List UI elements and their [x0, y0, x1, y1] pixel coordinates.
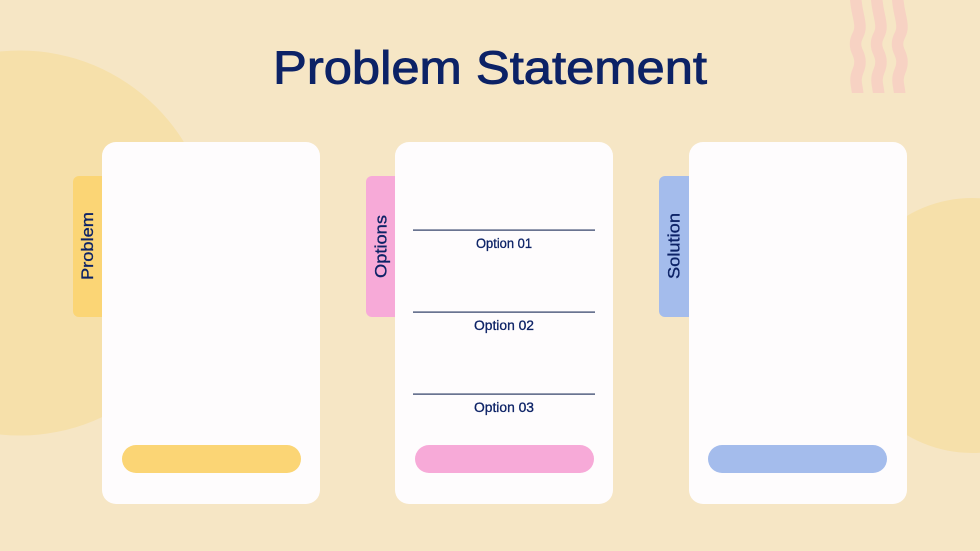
tab label: options: Options — [372, 215, 390, 278]
tab label: problem: Problem — [79, 212, 97, 280]
title: Problem Statement — [273, 42, 707, 94]
option 03: Option 03 — [474, 400, 534, 415]
pill: problem — [122, 445, 301, 473]
tab label: solution: Solution — [666, 213, 684, 279]
card: problem — [102, 142, 320, 504]
option 02: Option 02 — [474, 318, 534, 333]
option 01: Option 01 — [476, 236, 532, 251]
tab: options — [366, 176, 395, 317]
panel: solution — [659, 142, 907, 504]
tab: solution — [659, 176, 689, 317]
decorative circle: right — [844, 198, 980, 453]
icon: pink wavy lines — [856, 0, 902, 98]
tab: problem — [73, 176, 102, 317]
card: options — [395, 142, 613, 504]
pill: solution — [708, 445, 887, 473]
decorative circle: left — [0, 50, 212, 436]
card: solution — [689, 142, 907, 504]
pill: options — [415, 445, 594, 473]
panel: problem — [73, 142, 320, 504]
panel: options — [366, 142, 613, 504]
